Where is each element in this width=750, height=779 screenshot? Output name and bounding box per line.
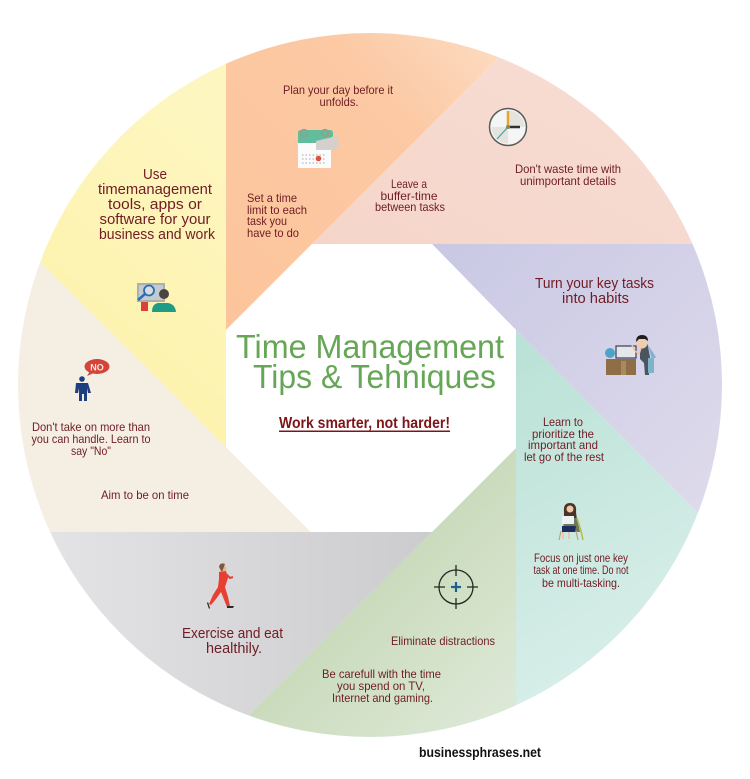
text: plan your day [283, 83, 394, 109]
text: key tasks habits: Turn your key tasks [535, 276, 654, 292]
text: time tools: Use [143, 166, 167, 183]
title: Tips & Tehniques [253, 358, 496, 395]
text: say no: Don't take on more than [32, 420, 150, 434]
panel: eliminate distractions (green) [248, 448, 516, 737]
centre octagon [226, 244, 516, 532]
text: careful with TV: Be carefull with the time [322, 667, 441, 681]
text: unimportant details: Don't waste time with [515, 162, 621, 176]
text: eliminate distractions: Eliminate distractions [391, 634, 495, 648]
text: plan your day: Plan your day before it [283, 83, 394, 97]
text: say no: say "No" [71, 444, 111, 458]
text: prioritize: prioritize the [532, 427, 594, 441]
icon: calendar [298, 130, 339, 168]
icon: person saying no: NO [90, 362, 104, 372]
title [236, 328, 504, 395]
text: prioritize [524, 415, 605, 464]
text: exercise: Exercise and eat [182, 626, 283, 642]
subtitle: Work smarter, not harder! [279, 415, 450, 432]
text: careful with TV: you spend on TV, [337, 679, 425, 693]
text: exercise [182, 626, 283, 657]
text: set a time limit: limit to each [247, 203, 307, 217]
text: buffer time: Leave a [391, 177, 427, 191]
icon: monitoring tools [137, 283, 176, 312]
icon: clock [490, 108, 526, 146]
panel: key tasks (purple) [432, 244, 722, 512]
text: time tools: tools, apps or [108, 196, 202, 213]
icon: runner [207, 563, 234, 609]
panel: say no (cream) [18, 262, 310, 532]
text: exercise: healthily. [206, 641, 262, 657]
text: focus on one task: be multi-tasking. [542, 576, 620, 590]
text: key tasks habits: into habits [562, 291, 629, 307]
text: focus on one task: Focus on just one key [534, 551, 628, 565]
text: careful with TV [322, 667, 441, 705]
text: buffer time: buffer-time [380, 189, 438, 203]
text: plan your day: unfolds. [320, 95, 358, 109]
icon: target crosshair [434, 565, 478, 609]
text: focus on one task: task at one time. Do not [534, 563, 629, 577]
panel: exercise (gray) [50, 532, 432, 716]
icon: person saying no [75, 359, 110, 401]
icon: man at desk [605, 335, 656, 375]
icon: woman with laptop [559, 503, 583, 540]
text: prioritize: let go of the rest [524, 450, 605, 464]
panel: plan your day (orange) [226, 33, 498, 330]
text: time tools: software for your [100, 211, 210, 228]
text: set a time limit: have to do [247, 226, 299, 240]
text: buffer time [375, 177, 445, 214]
text: key tasks habits [535, 276, 654, 307]
source url: businessphrases.net [419, 744, 541, 760]
text: say no [32, 420, 151, 458]
panel: prioritize (teal) [516, 330, 698, 705]
text: unimportant details: unimportant details [520, 174, 616, 188]
title: Time Management [236, 328, 504, 365]
text: aim to be on time: Aim to be on time [101, 488, 189, 502]
text: set a time limit: Set a time [247, 191, 297, 205]
text: set a time limit [247, 191, 307, 240]
panel: buffer time (pink) [312, 58, 692, 244]
text: time tools: business and work [99, 226, 215, 243]
panel: time tools (yellow) [40, 64, 226, 447]
text: buffer time: between tasks [375, 200, 445, 214]
text: prioritize: important and [528, 438, 598, 452]
text: say no: you can handle. Learn to [32, 432, 151, 446]
text: time tools: timemanagement [98, 181, 213, 198]
text: focus on one task [534, 551, 629, 590]
text: careful with TV: Internet and gaming. [332, 691, 433, 705]
text: prioritize: Learn to [543, 415, 583, 429]
text: unimportant details [515, 162, 621, 188]
text: set a time limit: task you [247, 214, 287, 228]
text: time tools [98, 166, 215, 243]
